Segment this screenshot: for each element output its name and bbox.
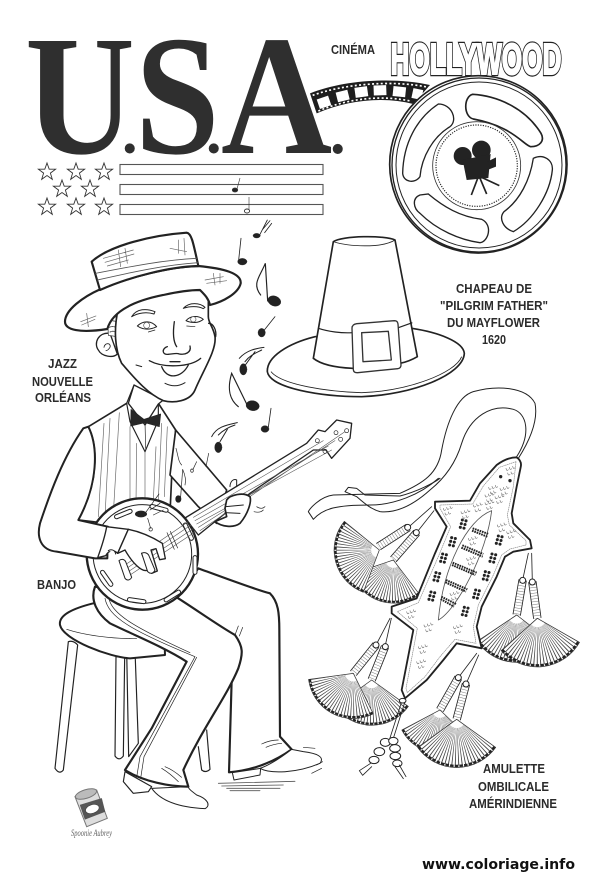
tuning pegs (315, 429, 349, 453)
neck (128, 385, 163, 425)
label: jazz: ORLÉANS (35, 390, 91, 405)
title: U.S.A.: . (206, 98, 222, 166)
label: amulet (469, 762, 557, 811)
reel hub dotted ring (436, 125, 517, 206)
note on banjo (135, 494, 163, 531)
note 5 (229, 373, 260, 412)
tailpiece (119, 559, 132, 580)
hat crown (313, 237, 417, 368)
nose (163, 322, 190, 354)
hat brim (65, 266, 241, 331)
face (115, 287, 215, 402)
title: U.S.A. (25, 2, 346, 191)
cord ends (359, 763, 406, 779)
hat band (96, 258, 198, 280)
right hand (215, 494, 250, 526)
small notes on the stripes (232, 178, 250, 213)
right upper arm (170, 430, 227, 523)
stool front leg (55, 641, 78, 772)
label: cinéma: CINÉMA (331, 42, 375, 57)
head strings (125, 522, 196, 575)
hat weave marks (81, 238, 227, 327)
film reel and film strip (310, 76, 567, 253)
banjo brackets (100, 504, 197, 604)
stool rear leg 2 (115, 657, 125, 759)
bottom cord (389, 702, 405, 740)
label: jazz (32, 357, 93, 405)
shirt front (127, 387, 158, 452)
tassel pair bottom (399, 705, 496, 767)
hair (107, 307, 119, 337)
amulet belly (438, 511, 492, 620)
back heel (232, 768, 261, 780)
hat label (440, 282, 548, 347)
tassel cords and wrapped stems (353, 507, 537, 719)
reel disc (392, 78, 566, 252)
ear detail (104, 344, 110, 351)
front leg (93, 587, 242, 787)
amulet eyes (499, 475, 512, 482)
front shoe (152, 787, 208, 809)
title: U.S.A.: A (221, 2, 332, 191)
bottom node (399, 698, 406, 703)
label: amulet: AMULETTE (483, 762, 545, 776)
stool seat (60, 603, 165, 658)
right ear (209, 323, 216, 337)
icon: movie camera (454, 141, 499, 195)
shoe motion lines (262, 740, 323, 773)
banjo head (93, 505, 192, 603)
cuff (98, 527, 128, 558)
amulet body (392, 457, 532, 698)
label: banjo: BANJO (37, 578, 76, 592)
reel windows (403, 94, 552, 243)
tassel pair left (326, 515, 427, 612)
hat label: DU MAYFLOWER (447, 316, 540, 330)
trouser stripe second line (141, 657, 197, 778)
pilgrim hat (267, 237, 464, 397)
hat brim inner edge (271, 357, 462, 393)
flag stars (38, 163, 113, 214)
vibration marks (254, 507, 265, 512)
cord beads (369, 737, 402, 767)
hand (118, 529, 165, 573)
stool rear leg (198, 730, 210, 772)
hat buckle (352, 321, 401, 373)
flag stripes (120, 164, 323, 214)
note 3 (258, 317, 275, 337)
hat brim (267, 328, 464, 397)
ribbons (308, 388, 536, 519)
title: U.S.A.: U (25, 2, 135, 191)
scale marks (407, 466, 516, 668)
reel inner rim (396, 82, 562, 248)
bead panels (427, 518, 504, 617)
knee creases (162, 626, 243, 782)
hat label: CHAPEAU DE (456, 282, 532, 296)
banjo neck (185, 420, 352, 535)
hair curls (109, 316, 117, 333)
icon: paint can (74, 787, 107, 827)
bow tie (131, 409, 161, 427)
smile and mouth (149, 358, 201, 376)
title: U.S.A.: S (135, 2, 220, 191)
stool rear leg 3 (127, 650, 138, 757)
floating music notes (212, 220, 282, 453)
right hand fingers (225, 480, 243, 513)
signature: Spoonie Aubrey (71, 829, 113, 839)
banjo strings (193, 432, 345, 531)
left arm (39, 427, 265, 558)
tassel pair right (477, 614, 582, 671)
back leg (177, 568, 292, 772)
amulet body inner line (397, 462, 526, 693)
note 2 (257, 263, 282, 308)
label: amulet: AMÉRINDIENNE (469, 796, 557, 811)
hat band (318, 323, 412, 333)
tassel pair lower left (300, 656, 408, 730)
fingers (108, 550, 155, 573)
hat crown top (333, 240, 395, 246)
title: U.S.A.: . (122, 98, 138, 166)
reel hub (433, 122, 521, 210)
banjo (87, 494, 198, 610)
bridge (167, 531, 178, 549)
floor shadow lines (218, 781, 295, 791)
film strip (310, 80, 430, 113)
stool and legs (55, 568, 323, 809)
hat label: "PILGRIM FATHER" (440, 299, 548, 313)
banjo body (87, 498, 198, 610)
tassel beads (373, 524, 535, 687)
note 4 (239, 347, 264, 375)
website: www.coloriage.info (422, 857, 575, 873)
notes on the sleeve (176, 448, 209, 502)
sleeve (39, 427, 108, 558)
vest stripes (98, 413, 167, 517)
front heel (123, 772, 152, 793)
eyes (137, 316, 203, 332)
left ear (96, 333, 117, 356)
hat crown (92, 233, 198, 290)
musician torso and head (65, 233, 352, 535)
note 6 (261, 408, 271, 432)
stool seat line (67, 629, 137, 638)
back shoe (260, 749, 321, 772)
belly bead rows (441, 528, 489, 607)
label: amulet: OMBILICALE (478, 780, 549, 794)
note 8 (253, 220, 272, 238)
hat label: 1620 (482, 333, 506, 347)
hat buckle hole (362, 331, 391, 362)
chin line (136, 365, 185, 386)
collar line (144, 423, 147, 448)
eyebrows (132, 304, 205, 317)
title: U.S.A.: . (330, 99, 346, 167)
label: jazz: NOUVELLE (32, 375, 93, 389)
trouser stripe (105, 598, 195, 777)
label: jazz: JAZZ (48, 357, 77, 371)
strumming hand (98, 527, 165, 573)
reel back edge (390, 76, 567, 253)
note 1 (238, 238, 247, 265)
vest (78, 403, 176, 523)
note 7 (212, 423, 237, 453)
amulet (300, 388, 582, 779)
